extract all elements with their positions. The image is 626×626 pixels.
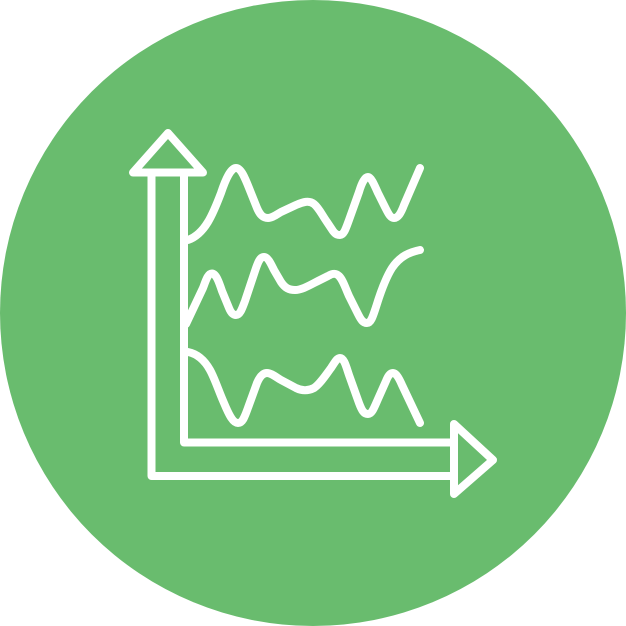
arrow: y axis — [133, 133, 203, 172]
chart icon — [133, 133, 493, 494]
line: bottom series — [188, 352, 420, 423]
line: top series — [188, 168, 420, 240]
axes — [152, 173, 454, 476]
arrow: x axis — [454, 424, 493, 494]
line: middle series — [186, 250, 420, 324]
